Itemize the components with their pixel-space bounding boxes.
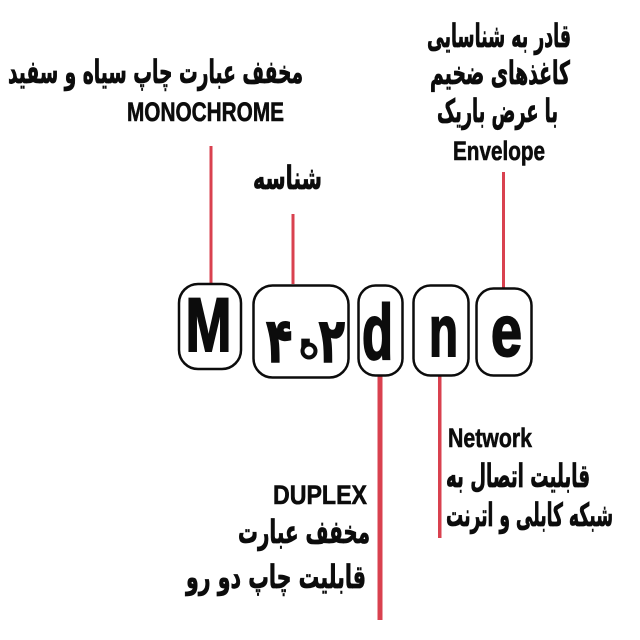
box: 402: ۴۰۲ <box>266 304 345 377</box>
label: monochrome <box>8 53 303 127</box>
box: n <box>414 286 468 376</box>
box: n: n <box>429 292 458 372</box>
box: 402 <box>254 286 348 378</box>
label: duplex: قابلیت چاپ دو رو <box>185 558 366 596</box>
monochrome connector line <box>210 146 212 285</box>
label: network: Network <box>448 423 533 453</box>
label: monochrome: مخفف عبارت چاپ سیاه و سفید <box>8 53 303 91</box>
label: envelope <box>427 17 571 166</box>
label: identifier: شناسه <box>253 159 322 197</box>
identifier connector line <box>292 214 294 284</box>
label: duplex: DUPLEX <box>273 480 367 510</box>
label: envelope: Envelope <box>453 136 545 166</box>
label: duplex <box>185 480 370 596</box>
box: e <box>476 288 532 376</box>
label: duplex: مخفف عبارت <box>238 513 370 551</box>
box: M: M <box>186 283 232 368</box>
label: monochrome: MONOCHROME <box>127 97 284 127</box>
duplex connector line <box>378 376 382 620</box>
box: e: e <box>491 292 522 372</box>
label: network <box>446 423 613 534</box>
box: d: d <box>362 288 393 376</box>
network connector line <box>438 376 442 538</box>
envelope connector line <box>502 172 505 291</box>
